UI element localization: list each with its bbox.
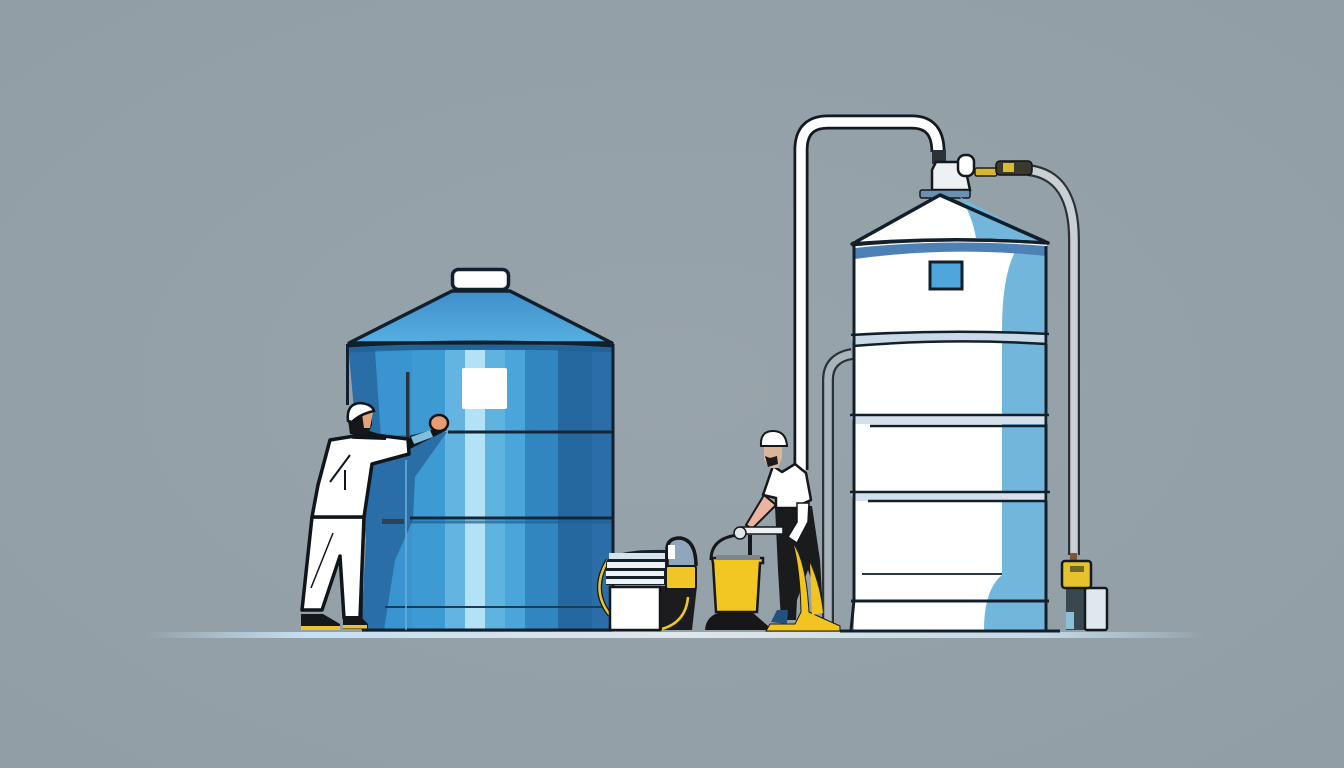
bucket body — [712, 558, 763, 612]
stem — [1066, 587, 1085, 630]
valve cap — [958, 155, 974, 176]
white screen box — [1085, 588, 1107, 630]
roof shade — [960, 197, 1044, 241]
yellow bucket — [705, 535, 768, 630]
neck — [932, 162, 970, 190]
white box — [610, 587, 660, 630]
legs — [302, 517, 364, 618]
hard hat — [348, 403, 374, 422]
hair and beard — [348, 410, 372, 436]
trousers — [775, 506, 823, 620]
band 1 — [851, 332, 1049, 346]
tank shadow from worker — [362, 432, 447, 630]
body — [854, 240, 1047, 630]
square window — [930, 262, 962, 289]
bucket base — [705, 612, 768, 630]
head — [764, 445, 782, 468]
front arm — [788, 503, 809, 543]
worker at left tank — [301, 403, 448, 630]
blue shade — [984, 250, 1047, 630]
tank body stripes — [348, 344, 613, 630]
thin lines — [862, 573, 1002, 575]
boots — [301, 614, 340, 630]
yellow stand — [766, 543, 840, 631]
roof — [852, 195, 1048, 244]
yellow gauge — [1062, 561, 1091, 588]
ground line — [145, 632, 1205, 638]
rod — [406, 372, 410, 438]
shoe — [771, 610, 788, 624]
white pipe over right tank — [801, 122, 938, 470]
wand — [741, 527, 783, 534]
tank outline — [348, 344, 613, 630]
left blue tank — [347, 270, 614, 630]
meter device — [1062, 553, 1107, 630]
tank window — [462, 368, 507, 409]
top band — [855, 242, 1046, 259]
hard hat — [761, 431, 787, 446]
handle — [667, 538, 696, 568]
black body — [660, 586, 697, 630]
body outline — [840, 246, 1060, 631]
lid — [452, 270, 508, 290]
worker with mop — [734, 431, 840, 631]
hose — [599, 560, 610, 615]
right white tank — [840, 155, 1060, 631]
back arm — [746, 495, 776, 529]
band lines — [347, 342, 614, 607]
forearm — [408, 425, 447, 450]
grey outlet pipe — [1028, 170, 1074, 555]
shirt — [763, 464, 811, 508]
roof — [349, 291, 612, 343]
louvers — [606, 550, 666, 585]
hand — [430, 415, 448, 431]
bucket handle — [711, 535, 738, 560]
yellow box — [666, 566, 696, 589]
lower inner pipe — [828, 354, 852, 630]
coupling — [932, 150, 1032, 176]
cleaning machine — [599, 538, 697, 630]
band 3 — [850, 492, 1050, 501]
band 2 — [850, 415, 1049, 426]
torso and arm — [312, 434, 409, 517]
face — [362, 412, 373, 428]
